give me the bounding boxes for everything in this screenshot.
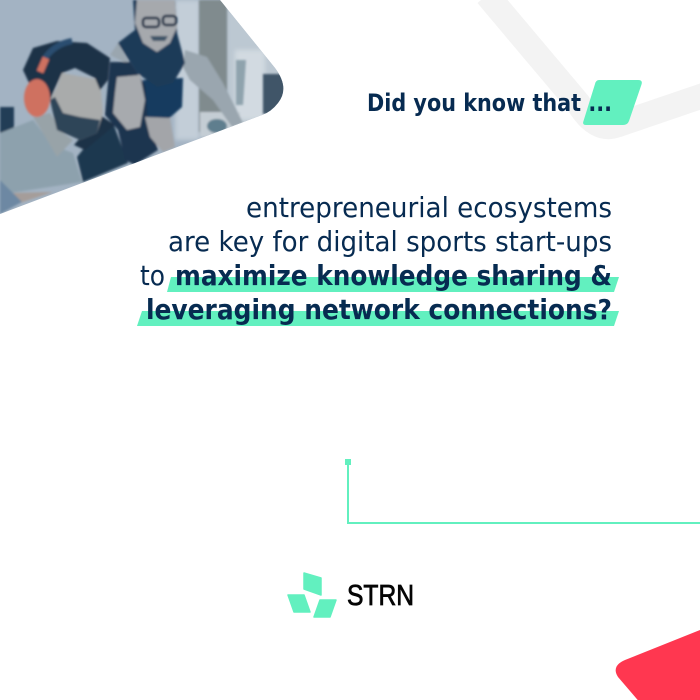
woman standing: arm and shoulders — [183, 50, 243, 127]
heading: did you know that — [367, 80, 642, 125]
main statement text — [140, 191, 612, 326]
icon: green parallelogram accent — [583, 80, 642, 125]
woman seated: body, hair, face — [77, 123, 128, 182]
main statement text: to — [140, 259, 165, 292]
photo: team at a screen — [0, 0, 300, 220]
man: shirt, head, hair, beard, arm — [0, 120, 82, 197]
decorative red corner shape — [616, 628, 700, 700]
heading: did you know that: Did you know that ... — [367, 89, 612, 117]
main statement text: leveraging network connections? — [146, 293, 612, 326]
decorative grey chevron band — [487, 0, 700, 127]
highlight bar: line three — [167, 277, 619, 292]
logo: STRN — [288, 573, 414, 617]
main statement text: are key for digital sports start-ups — [168, 225, 612, 258]
icon: logo mark — [288, 573, 336, 617]
connector line with square end — [345, 459, 700, 523]
main statement text: maximize knowledge sharing & — [175, 259, 612, 292]
highlight bar: line four — [137, 311, 619, 326]
logo: STRN: STRN — [347, 580, 414, 612]
main statement text: entrepreneurial ecosystems — [246, 191, 612, 224]
